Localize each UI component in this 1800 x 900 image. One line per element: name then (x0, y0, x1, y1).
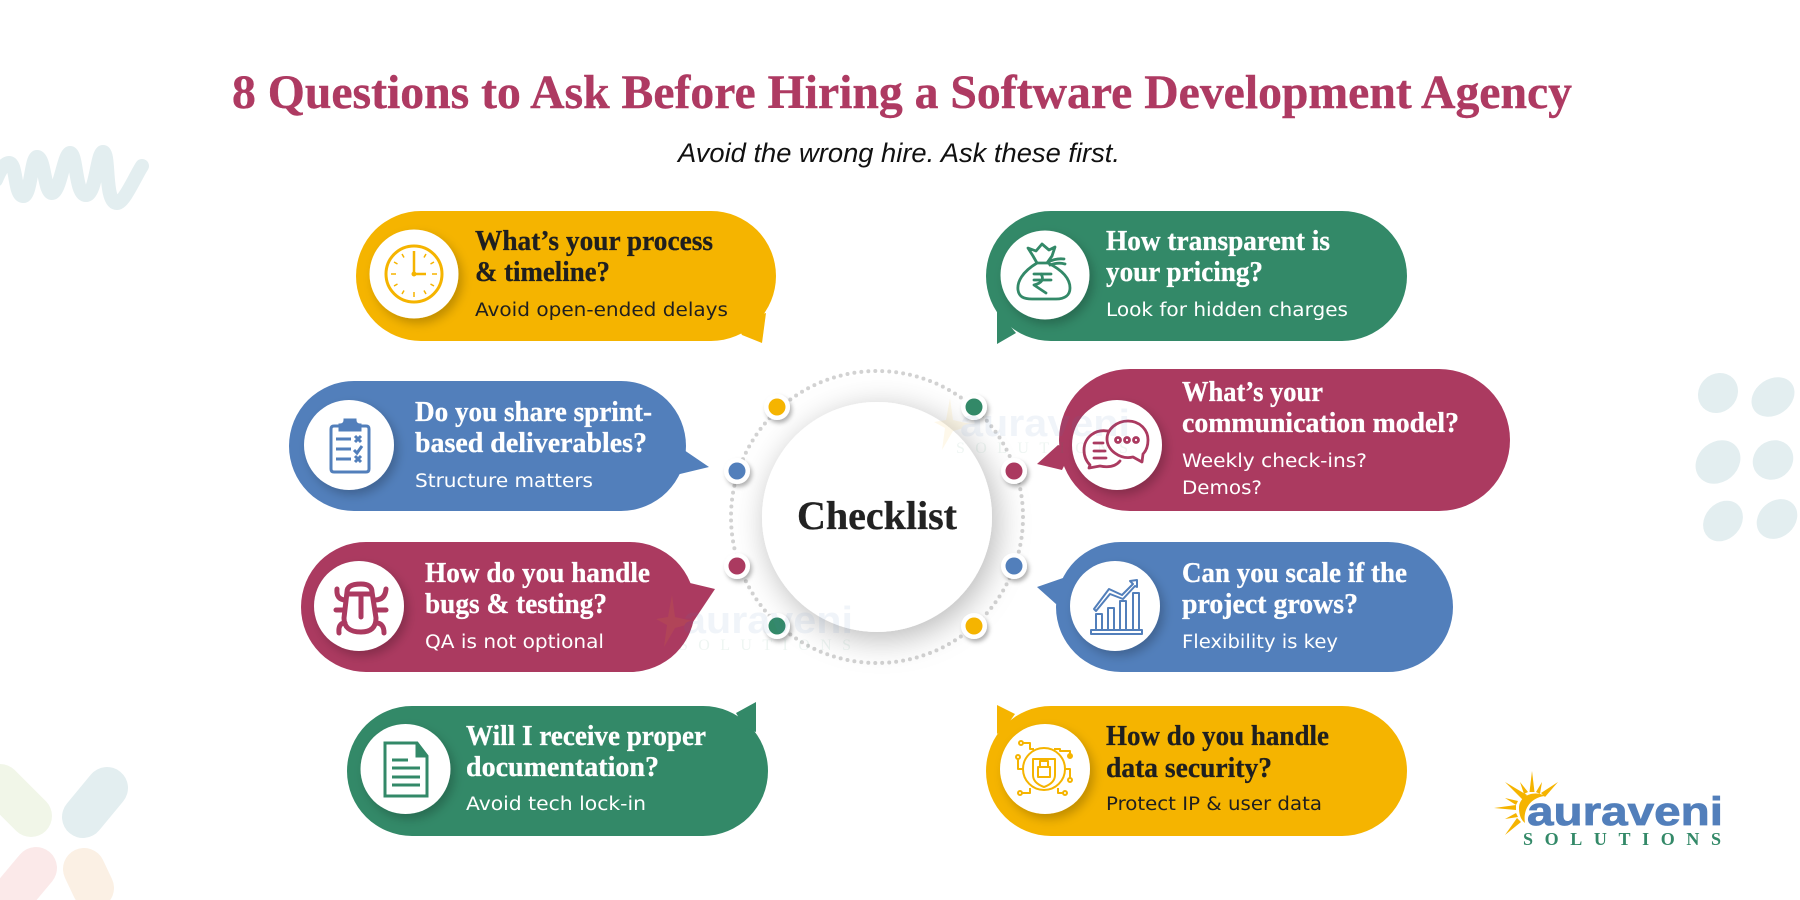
card: sprint deliverables: based deliverables? (415, 428, 647, 459)
icon: money bag with rupee (1018, 244, 1070, 299)
card: scaling: Flexibility is key (1182, 632, 1338, 653)
icon: circuit shield lock (1016, 741, 1072, 795)
card: sprint deliverables: Structure matters (415, 471, 593, 492)
watermark logo upper (934, 398, 1130, 457)
card: data security: How do you handle (1106, 721, 1329, 752)
card: transparent pricing: How transparent is (1106, 226, 1330, 257)
card: documentation (347, 702, 768, 836)
card: transparent pricing: your pricing? (1106, 257, 1263, 288)
card: process and timeline: Avoid open-ended delays (475, 300, 728, 321)
card: communication model: communication model? (1182, 408, 1459, 439)
center circle: Checklist (797, 493, 958, 538)
card: documentation: Avoid tech lock-in (466, 794, 646, 815)
icon: document (385, 743, 427, 796)
title: 8 Questions to Ask Before Hiring a Software Development Agency (232, 66, 1572, 119)
card: documentation: Will I receive proper (466, 721, 706, 752)
ring markers (724, 394, 1027, 639)
subtitle: Avoid the wrong hire. Ask these first. (676, 138, 1120, 168)
card: transparent pricing: Look for hidden charges (1106, 300, 1348, 321)
icon: growth chart (1091, 580, 1142, 634)
watermark logo upper: SOLUTIONS (956, 440, 1128, 457)
card: transparent pricing (986, 211, 1407, 344)
dotted ring (731, 371, 1023, 663)
watermark logo lower: auraveni (683, 600, 853, 642)
logo: Auraveni Solutions: SOLUTIONS (1523, 829, 1721, 849)
decorative dots right (1687, 365, 1800, 549)
watermark logo upper: auraveni (960, 403, 1130, 445)
card: data security (986, 705, 1407, 836)
card: communication model (1037, 369, 1510, 511)
logo: Auraveni Solutions: auraveni (1527, 790, 1723, 834)
card: process and timeline: & timeline? (475, 257, 610, 288)
card: sprint deliverables: Do you share sprint- (415, 397, 652, 428)
card: scaling: Can you scale if the (1182, 558, 1407, 589)
card: communication model: Weekly check-ins? (1182, 451, 1367, 472)
card: bugs and testing: QA is not optional (425, 632, 604, 653)
icon: chat bubbles (1084, 421, 1148, 468)
card: scaling (1037, 542, 1453, 672)
card: sprint deliverables (289, 381, 709, 511)
card: process and timeline (356, 211, 776, 343)
icon: bug (336, 584, 386, 633)
center circle (762, 402, 992, 632)
card: process and timeline: What’s your process (475, 226, 713, 257)
card: communication model: What’s your (1182, 377, 1323, 408)
watermark logo lower (656, 595, 853, 654)
decorative pills bottom-left (0, 785, 107, 900)
card: documentation: documentation? (466, 752, 659, 783)
icon: clock (386, 246, 442, 302)
watermark logo lower: SOLUTIONS (679, 637, 851, 654)
card: data security: data security? (1106, 753, 1272, 784)
decorative squiggle (0, 152, 142, 203)
card: communication model: Demos? (1182, 478, 1262, 499)
card: bugs and testing: How do you handle (425, 558, 650, 589)
card: data security: Protect IP & user data (1106, 794, 1322, 815)
icon: clipboard checklist (331, 420, 369, 472)
card: bugs and testing: bugs & testing? (425, 589, 607, 620)
logo: Auraveni Solutions (1494, 771, 1723, 849)
card: scaling: project grows? (1182, 589, 1358, 620)
card: bugs and testing (301, 542, 715, 672)
